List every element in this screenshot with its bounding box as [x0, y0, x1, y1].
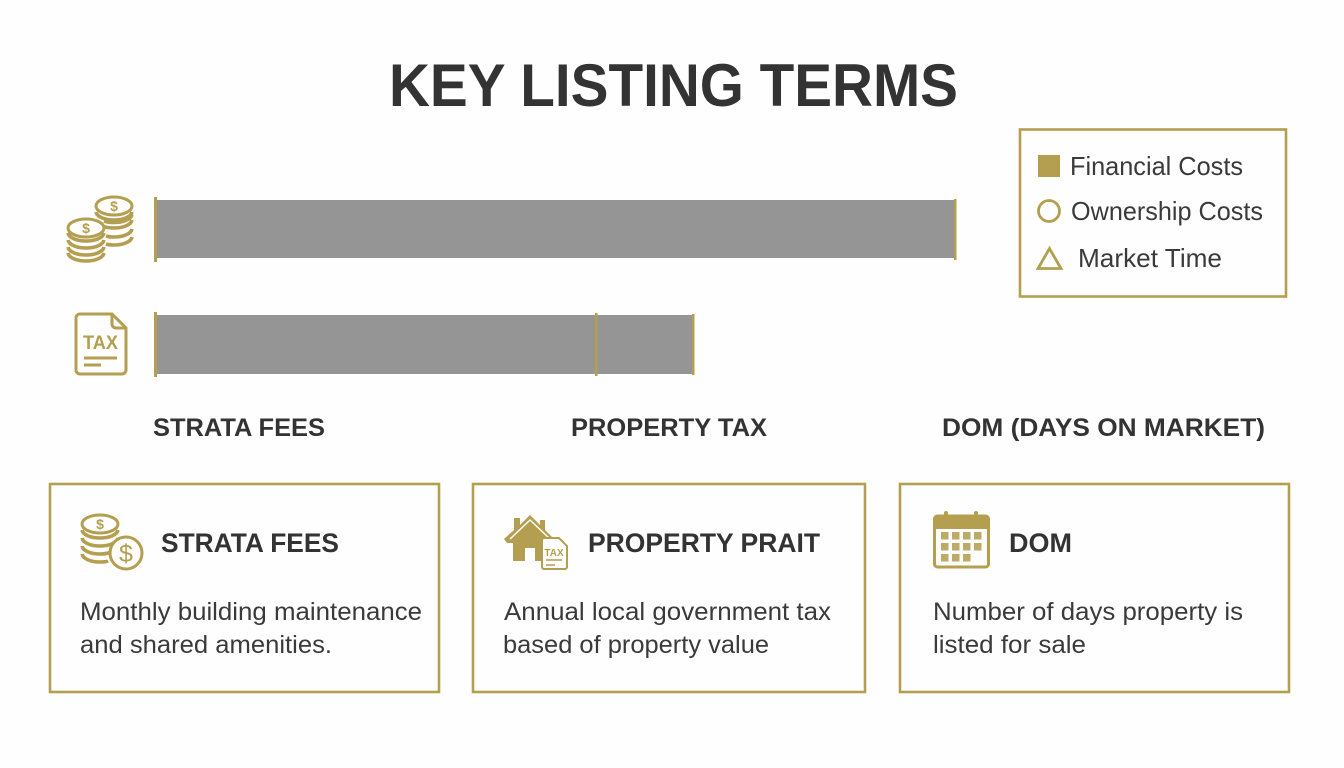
card text — [933, 598, 1243, 659]
card text: based of property value — [503, 631, 769, 659]
legend item: financial costs: Financial Costs — [1070, 151, 1243, 181]
icon: house with tax document — [504, 515, 567, 569]
panel: dom — [900, 484, 1289, 692]
bar: financial costs — [154, 197, 956, 262]
bar: ownership costs — [154, 312, 694, 377]
legend — [1020, 130, 1286, 296]
icon: coin stacks — [68, 197, 132, 261]
card text: listed for sale — [933, 631, 1086, 659]
card text: Annual local government tax — [504, 598, 832, 626]
card text: Monthly building maintenance — [80, 598, 422, 626]
legend item: market time: Market Time — [1078, 243, 1222, 273]
icon: tax document: TAX — [83, 333, 118, 354]
axis label: strata fees: STRATA FEES — [153, 414, 325, 442]
card text: and shared amenities. — [80, 631, 332, 659]
card text — [503, 598, 832, 659]
card text — [80, 598, 422, 659]
icon: coins with dollar — [82, 515, 142, 569]
card heading: PROPERTY PRAIT — [588, 528, 820, 558]
legend item: ownership costs: Ownership Costs — [1071, 196, 1263, 226]
icon: house with tax document: TAX — [544, 548, 564, 559]
panel: strata fees — [50, 484, 439, 692]
icon: coins with dollar: $ — [119, 540, 133, 568]
icon: coin stacks: $ — [82, 220, 90, 236]
axis label: property tax: PROPERTY TAX — [571, 414, 767, 442]
icon: tax document — [76, 314, 126, 374]
icon: coins with dollar: $ — [96, 516, 104, 532]
title: KEY LISTING TERMS — [389, 52, 958, 119]
card heading: DOM — [1009, 528, 1072, 558]
icon: coin stacks: $ — [110, 198, 118, 214]
card text: Number of days property is — [933, 598, 1243, 626]
axis label: days on market: DOM (DAYS ON MARKET) — [942, 414, 1265, 442]
card heading: STRATA FEES — [161, 528, 339, 558]
icon: calendar — [934, 511, 989, 567]
panel: property tax — [473, 484, 865, 692]
